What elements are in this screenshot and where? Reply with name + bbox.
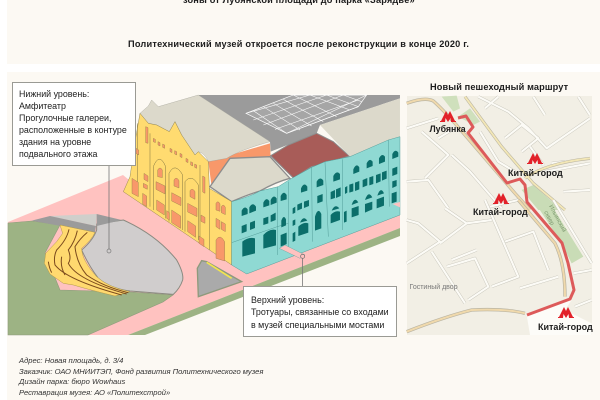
footer credits [18, 356, 264, 396]
dark slab [97, 214, 122, 226]
metro icon Kitay-gorod west [493, 193, 509, 204]
map roads [407, 99, 530, 210]
callout: lower level: Прогулочные галереи, [19, 113, 111, 123]
teal walkway [279, 245, 305, 258]
map park patches [442, 96, 460, 112]
map label Kitay-gorod east: Китай-город [508, 168, 563, 178]
amphitheatre [32, 214, 242, 297]
footer credits: Дизайн парка: бюро Wowhaus [19, 377, 125, 386]
callout: lower level: расположенные в контуре [19, 125, 127, 135]
map street casing lower [407, 200, 592, 307]
red roof [271, 133, 349, 178]
inner roof dark [198, 95, 400, 152]
seating lines [48, 229, 128, 295]
callout: upper level: в музей специальными мостами [251, 320, 384, 330]
leader upper level [301, 254, 305, 258]
footer credits: Реставрация музея: АО «Политехстрой» [19, 388, 170, 396]
map heading: Новый пешеходный маршрут [430, 82, 568, 92]
plaza ellipse [82, 220, 183, 294]
metro icon Lubyanka [440, 111, 456, 122]
teal lines [232, 140, 389, 255]
callout: upper level: Тротуары, связанные со входами [251, 307, 389, 317]
pink pavement [8, 175, 400, 335]
green strip [128, 228, 400, 335]
callout: lower level: здания на уровне [19, 137, 91, 147]
cream roof left [140, 95, 270, 162]
pedestrian route map: сквер [542, 210, 555, 227]
yellow facade [123, 113, 232, 265]
callout: lower level [12, 82, 136, 166]
subtitle: Политехнический музей откроется после реконструкции в конце 2020 г. [128, 39, 469, 49]
callout: upper level: Верхний уровень: [251, 295, 324, 305]
map white plot [527, 300, 592, 335]
map label Lubyanka: Лубянка [430, 124, 466, 134]
callout: lower level: Амфитеатр [19, 101, 66, 111]
map label Gostiny Dvor: Гостиный двор [410, 283, 458, 291]
cream roof right [320, 98, 400, 157]
seating [44, 225, 130, 296]
route line [458, 116, 574, 315]
orange windows [132, 127, 225, 261]
yellow bench [207, 262, 232, 278]
skylight [246, 95, 367, 133]
metro icon Kitay-gorod east [527, 153, 543, 164]
callout: lower level: подвального этажа [19, 149, 97, 159]
map park label: Ильинский [547, 204, 567, 233]
leader lower level [107, 249, 111, 253]
metro icon Kitay-gorod south [558, 307, 574, 318]
pedestrian route map [407, 96, 593, 335]
footer credits: Заказчик: ОАО МНИИТЭП, Фонд развития Политехнического музея [19, 366, 263, 376]
park lawn [8, 221, 173, 335]
map street casing [407, 97, 590, 208]
small triangle planter [197, 261, 242, 297]
yellow facade details [137, 123, 209, 250]
map label Kitay-gorod south: Китай-город [538, 322, 593, 332]
map park [533, 200, 583, 263]
map label Kitay-gorod west: Китай-город [473, 207, 528, 217]
teal windows [242, 151, 398, 257]
callout: lower level: Нижний уровень: [19, 89, 89, 99]
callout: upper level [243, 286, 397, 337]
dark step [32, 216, 96, 232]
teal facade [232, 137, 400, 274]
footer credits: Адрес: Новая площадь, д. 3/4 [19, 356, 123, 365]
cream roof centre [210, 157, 290, 202]
upper slab [50, 214, 97, 226]
museum building [123, 95, 400, 274]
map roads lower [407, 200, 565, 332]
orange wedge [208, 143, 271, 187]
